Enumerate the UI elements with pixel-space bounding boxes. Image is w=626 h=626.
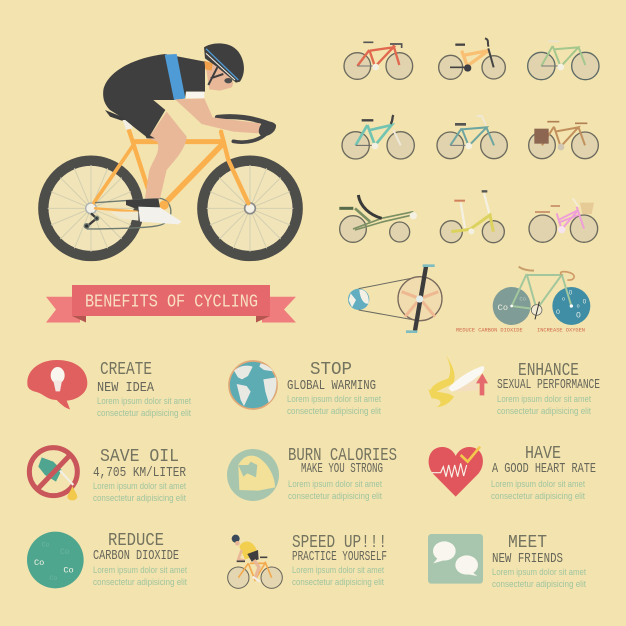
jersey blue strap: [165, 54, 185, 100]
heading: CREATE: [100, 360, 152, 380]
chain and derailleur: [84, 198, 171, 229]
item: enhance performance: [428, 355, 600, 416]
body text: Lorem ipsum dolor sit amet: [497, 394, 591, 404]
icon: co2 circle: Co: [42, 541, 50, 549]
rider jersey and shorts: [103, 54, 205, 138]
subheading: 4,705 KM/LITER: [93, 466, 186, 481]
body text: [292, 565, 384, 587]
heading: BURN CALORIES: [288, 446, 397, 466]
item: save oil: [29, 447, 186, 503]
icon: flexed arm: [227, 449, 279, 501]
body text: [97, 396, 191, 418]
subheading: NEW FRIENDS: [492, 552, 563, 567]
icon: co2 circle: [27, 532, 84, 588]
heading: SPEED UP!!!: [292, 533, 387, 553]
bicycle with co2 and oxygen wheels: [493, 267, 590, 325]
heading: HAVE: [525, 444, 561, 464]
saddle: [105, 110, 128, 121]
body text: [287, 394, 381, 416]
front wheel: [202, 161, 298, 256]
body text: [497, 394, 591, 416]
main illustration: cyclist on road bike: [43, 43, 298, 256]
icon: small cyclist: [228, 535, 282, 588]
bike: red road: [344, 42, 413, 79]
body text: consectetur adipisicing elit: [497, 406, 591, 416]
bike: pink city with basket: [529, 198, 598, 242]
item: reduce carbon dioxide: [27, 531, 187, 588]
bike: brown touring with rack: [529, 122, 598, 159]
ribbon tails: [46, 297, 80, 322]
glove: [259, 121, 276, 136]
body text: consectetur adipisicing elit: [287, 406, 381, 416]
icon: co2 circle: Co: [34, 558, 44, 568]
bike: green recumbent: [339, 195, 417, 242]
body text: consectetur adipisicing elit: [491, 491, 585, 501]
bicycle with co2 and oxygen wheels: O: [576, 311, 581, 320]
body text: Lorem ipsum dolor sit amet: [93, 481, 186, 491]
rider head: [205, 62, 233, 91]
handlebars: [217, 117, 272, 142]
item: meet new friends: [428, 533, 586, 589]
subheading: CARBON DIOXIDE: [93, 549, 179, 564]
item: good heart rate: [429, 444, 596, 501]
banner: benefits of cycling: [46, 285, 296, 322]
item: stop global warming: [229, 360, 381, 416]
bike frame: [94, 128, 248, 212]
bicycle with co2 and oxygen wheels: O: [569, 289, 573, 296]
subheading: A GOOD HEART RATE: [492, 462, 596, 477]
body text: consectetur adipisicing elit: [288, 491, 382, 501]
white sleeve band: [186, 92, 204, 98]
body text: consectetur adipisicing elit: [97, 408, 191, 418]
heading: MEET: [508, 533, 547, 553]
ribbon body: [72, 285, 270, 316]
item: burn calories: [227, 446, 397, 501]
icon: banana with arrow: [428, 355, 488, 407]
banner title: BENEFITS OF CYCLING: [85, 292, 258, 312]
body text: Lorem ipsum dolor sit amet: [97, 396, 191, 406]
icon: co2 circle: Co: [60, 548, 70, 557]
bike: orange city: [439, 38, 505, 79]
heading: STOP: [310, 360, 352, 380]
rider leg: [145, 112, 187, 198]
body text: Lorem ipsum dolor sit amet: [288, 479, 382, 489]
bike: yellow folding: [440, 191, 504, 243]
bike: green fixed: [528, 41, 599, 80]
bicycle with co2 and oxygen wheels: O: [562, 297, 565, 303]
rider far leg and shoe: [126, 198, 160, 208]
bike grid: nine bicycle types: [339, 38, 599, 243]
body text: [93, 565, 187, 587]
subheading: PRACTICE YOURSELF: [292, 550, 387, 565]
body text: [492, 567, 586, 589]
rear wheel: [43, 161, 139, 256]
body text: [93, 481, 186, 503]
icon: no oil sign: [29, 448, 77, 500]
item: speed up: [228, 533, 387, 588]
body text: Lorem ipsum dolor sit amet: [492, 567, 586, 577]
icon: speech bubbles: [428, 534, 483, 584]
icon: globe: [229, 361, 277, 409]
caption: increase oxygen: INCREASE OXYGEN: [537, 327, 585, 333]
body text: consectetur adipisicing elit: [492, 579, 586, 589]
heading: ENHANCE: [518, 361, 579, 381]
icon: brain with light bulb: [27, 360, 87, 409]
bike: teal mountain: [342, 115, 414, 159]
bike: blue cruiser: [437, 116, 507, 159]
icon: heart with pulse: [429, 447, 483, 497]
bicycle with co2 and oxygen wheels: Co: [519, 296, 527, 303]
icon: co2 circle: Co: [49, 574, 57, 582]
earth and crank: [348, 266, 442, 332]
subheading: GLOBAL WARMING: [287, 379, 376, 394]
heading: REDUCE: [108, 531, 164, 551]
helmet: [204, 43, 244, 83]
body text: [288, 479, 382, 501]
concept illustrations: earth chain and co2 wheels: [348, 266, 590, 333]
body text: [491, 479, 585, 501]
body text: consectetur adipisicing elit: [292, 577, 384, 587]
heading: SAVE OIL: [100, 447, 179, 467]
bicycle with co2 and oxygen wheels: Co: [498, 303, 508, 313]
body text: Lorem ipsum dolor sit amet: [491, 479, 585, 489]
body text: consectetur adipisicing elit: [93, 577, 187, 587]
icon: co2 circle: Co: [63, 566, 74, 576]
seat post: [123, 120, 133, 130]
rider arm: [175, 98, 261, 133]
body text: consectetur adipisicing elit: [93, 493, 186, 503]
bicycle with co2 and oxygen wheels: O: [556, 308, 560, 316]
bicycle with co2 and oxygen wheels: O: [577, 303, 580, 309]
item: create new idea: [27, 360, 191, 418]
rider shoes: [110, 207, 182, 224]
bicycle with co2 and oxygen wheels: O: [583, 298, 587, 305]
body text: Lorem ipsum dolor sit amet: [287, 394, 381, 404]
subheading: NEW IDEA: [97, 381, 155, 396]
body text: Lorem ipsum dolor sit amet: [292, 565, 384, 575]
body text: Lorem ipsum dolor sit amet: [93, 565, 187, 575]
subheading: MAKE YOU STRONG: [301, 462, 383, 477]
caption: reduce carbon dioxide: REDUCE CARBON DIOXIDE: [456, 327, 523, 333]
